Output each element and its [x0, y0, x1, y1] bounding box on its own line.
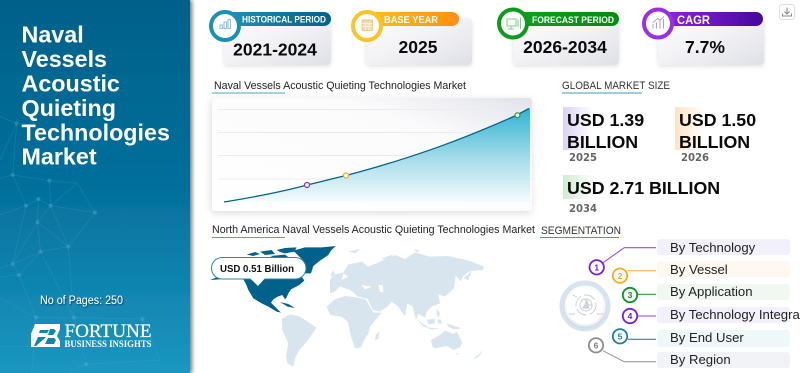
heading: segmentation: SEGMENTATION	[541, 225, 621, 237]
stat: 2025 market size	[563, 107, 644, 164]
segment 5: By End User	[613, 329, 790, 347]
title: Quieting	[22, 95, 116, 121]
callout: North America value	[212, 258, 306, 286]
data point 2025	[344, 173, 348, 178]
segment 3: By Application: 3	[628, 290, 633, 300]
stat: 2026 market size: USD 1.50	[679, 110, 756, 130]
icon: download button	[780, 4, 794, 20]
stat: 2025 market size: 2025	[569, 152, 597, 164]
segment 2: By Vessel: 2	[618, 271, 623, 281]
card: forecast period	[499, 10, 619, 65]
segment 4: By Technology Integration: 4	[628, 311, 633, 321]
stat: 2025 market size: USD 1.39	[567, 110, 644, 130]
card: base year: BASE YEAR	[384, 14, 438, 26]
segmentation hub icon	[562, 283, 608, 329]
data point 2021	[304, 182, 310, 188]
icon: calendar	[362, 20, 372, 30]
card: base year: 2025	[399, 37, 438, 57]
icon: growth chart	[652, 16, 664, 28]
page count: No of Pages: 250	[40, 295, 123, 307]
segment 2: By Vessel	[613, 261, 790, 283]
card: forecast period: 2026-2034	[523, 37, 607, 57]
title: Market	[22, 144, 97, 170]
title: Vessels	[22, 46, 107, 72]
title	[22, 22, 170, 170]
segment 1: By Technology: 1	[594, 262, 599, 272]
segment 6: By Region: By Region	[670, 352, 731, 367]
card: forecast period: FORECAST PERIOD	[532, 15, 614, 26]
stat: 2034 market size: USD 2.71 BILLION	[567, 178, 720, 198]
logo: Fortune Business Insights: BUSINESS INSIGHTS	[64, 339, 152, 349]
callout: North America value: USD 0.51 Billion	[220, 264, 294, 275]
stat: 2026 market size: BILLION	[679, 132, 750, 152]
segment 1: By Technology: By Technology	[670, 240, 756, 255]
heading: global market size: GLOBAL MARKET SIZE	[562, 80, 670, 92]
card: historical period: 2021-2024	[233, 40, 317, 60]
area under curve	[224, 108, 530, 202]
logo: Fortune Business Insights: FORTUNE	[64, 322, 152, 342]
chart: market growth curve	[212, 98, 532, 211]
icon: bar chart	[220, 20, 230, 28]
segment 1: By Technology	[590, 239, 790, 274]
stat: 2026 market size: 2026	[681, 152, 709, 164]
segment 6: By Region: 6	[594, 340, 599, 350]
stat: 2025 market size: BILLION	[567, 132, 638, 152]
title: Technologies	[22, 120, 170, 146]
heading: market chart: Naval Vessels Acoustic Quieting Technologies Market	[214, 80, 467, 92]
card: base year	[353, 12, 472, 65]
card: historical period	[211, 12, 331, 65]
trend line	[224, 108, 529, 202]
segment 5: By End User: By End User	[670, 330, 744, 345]
stat: 2034 market size: 2034	[569, 203, 597, 215]
stat: 2026 market size	[675, 107, 756, 164]
segment 5: By End User: 5	[618, 332, 623, 342]
card: CAGR: CAGR	[677, 13, 710, 27]
segment 6: By Region	[589, 338, 790, 368]
card: historical period: HISTORICAL PERIOD	[242, 14, 326, 26]
card: CAGR	[644, 10, 764, 65]
heading: North America: North America Naval Vessels Acoustic Quieting Technologies Market	[212, 224, 536, 236]
panel: left sidebar	[0, 0, 190, 373]
title: Acoustic	[22, 70, 120, 96]
logo: Fortune Business Insights	[31, 322, 152, 349]
title: Naval	[22, 22, 84, 48]
stat: 2034 market size	[563, 175, 720, 215]
card: CAGR: 7.7%	[685, 37, 725, 57]
segment 3: By Application: By Application	[670, 284, 753, 299]
segment 4: By Technology Integration	[623, 307, 800, 323]
icon: forecast screen	[507, 18, 520, 29]
segment 3: By Application	[623, 284, 790, 302]
segment 2: By Vessel: By Vessel	[670, 262, 728, 277]
data point 2034	[515, 113, 520, 118]
world map	[210, 246, 484, 367]
